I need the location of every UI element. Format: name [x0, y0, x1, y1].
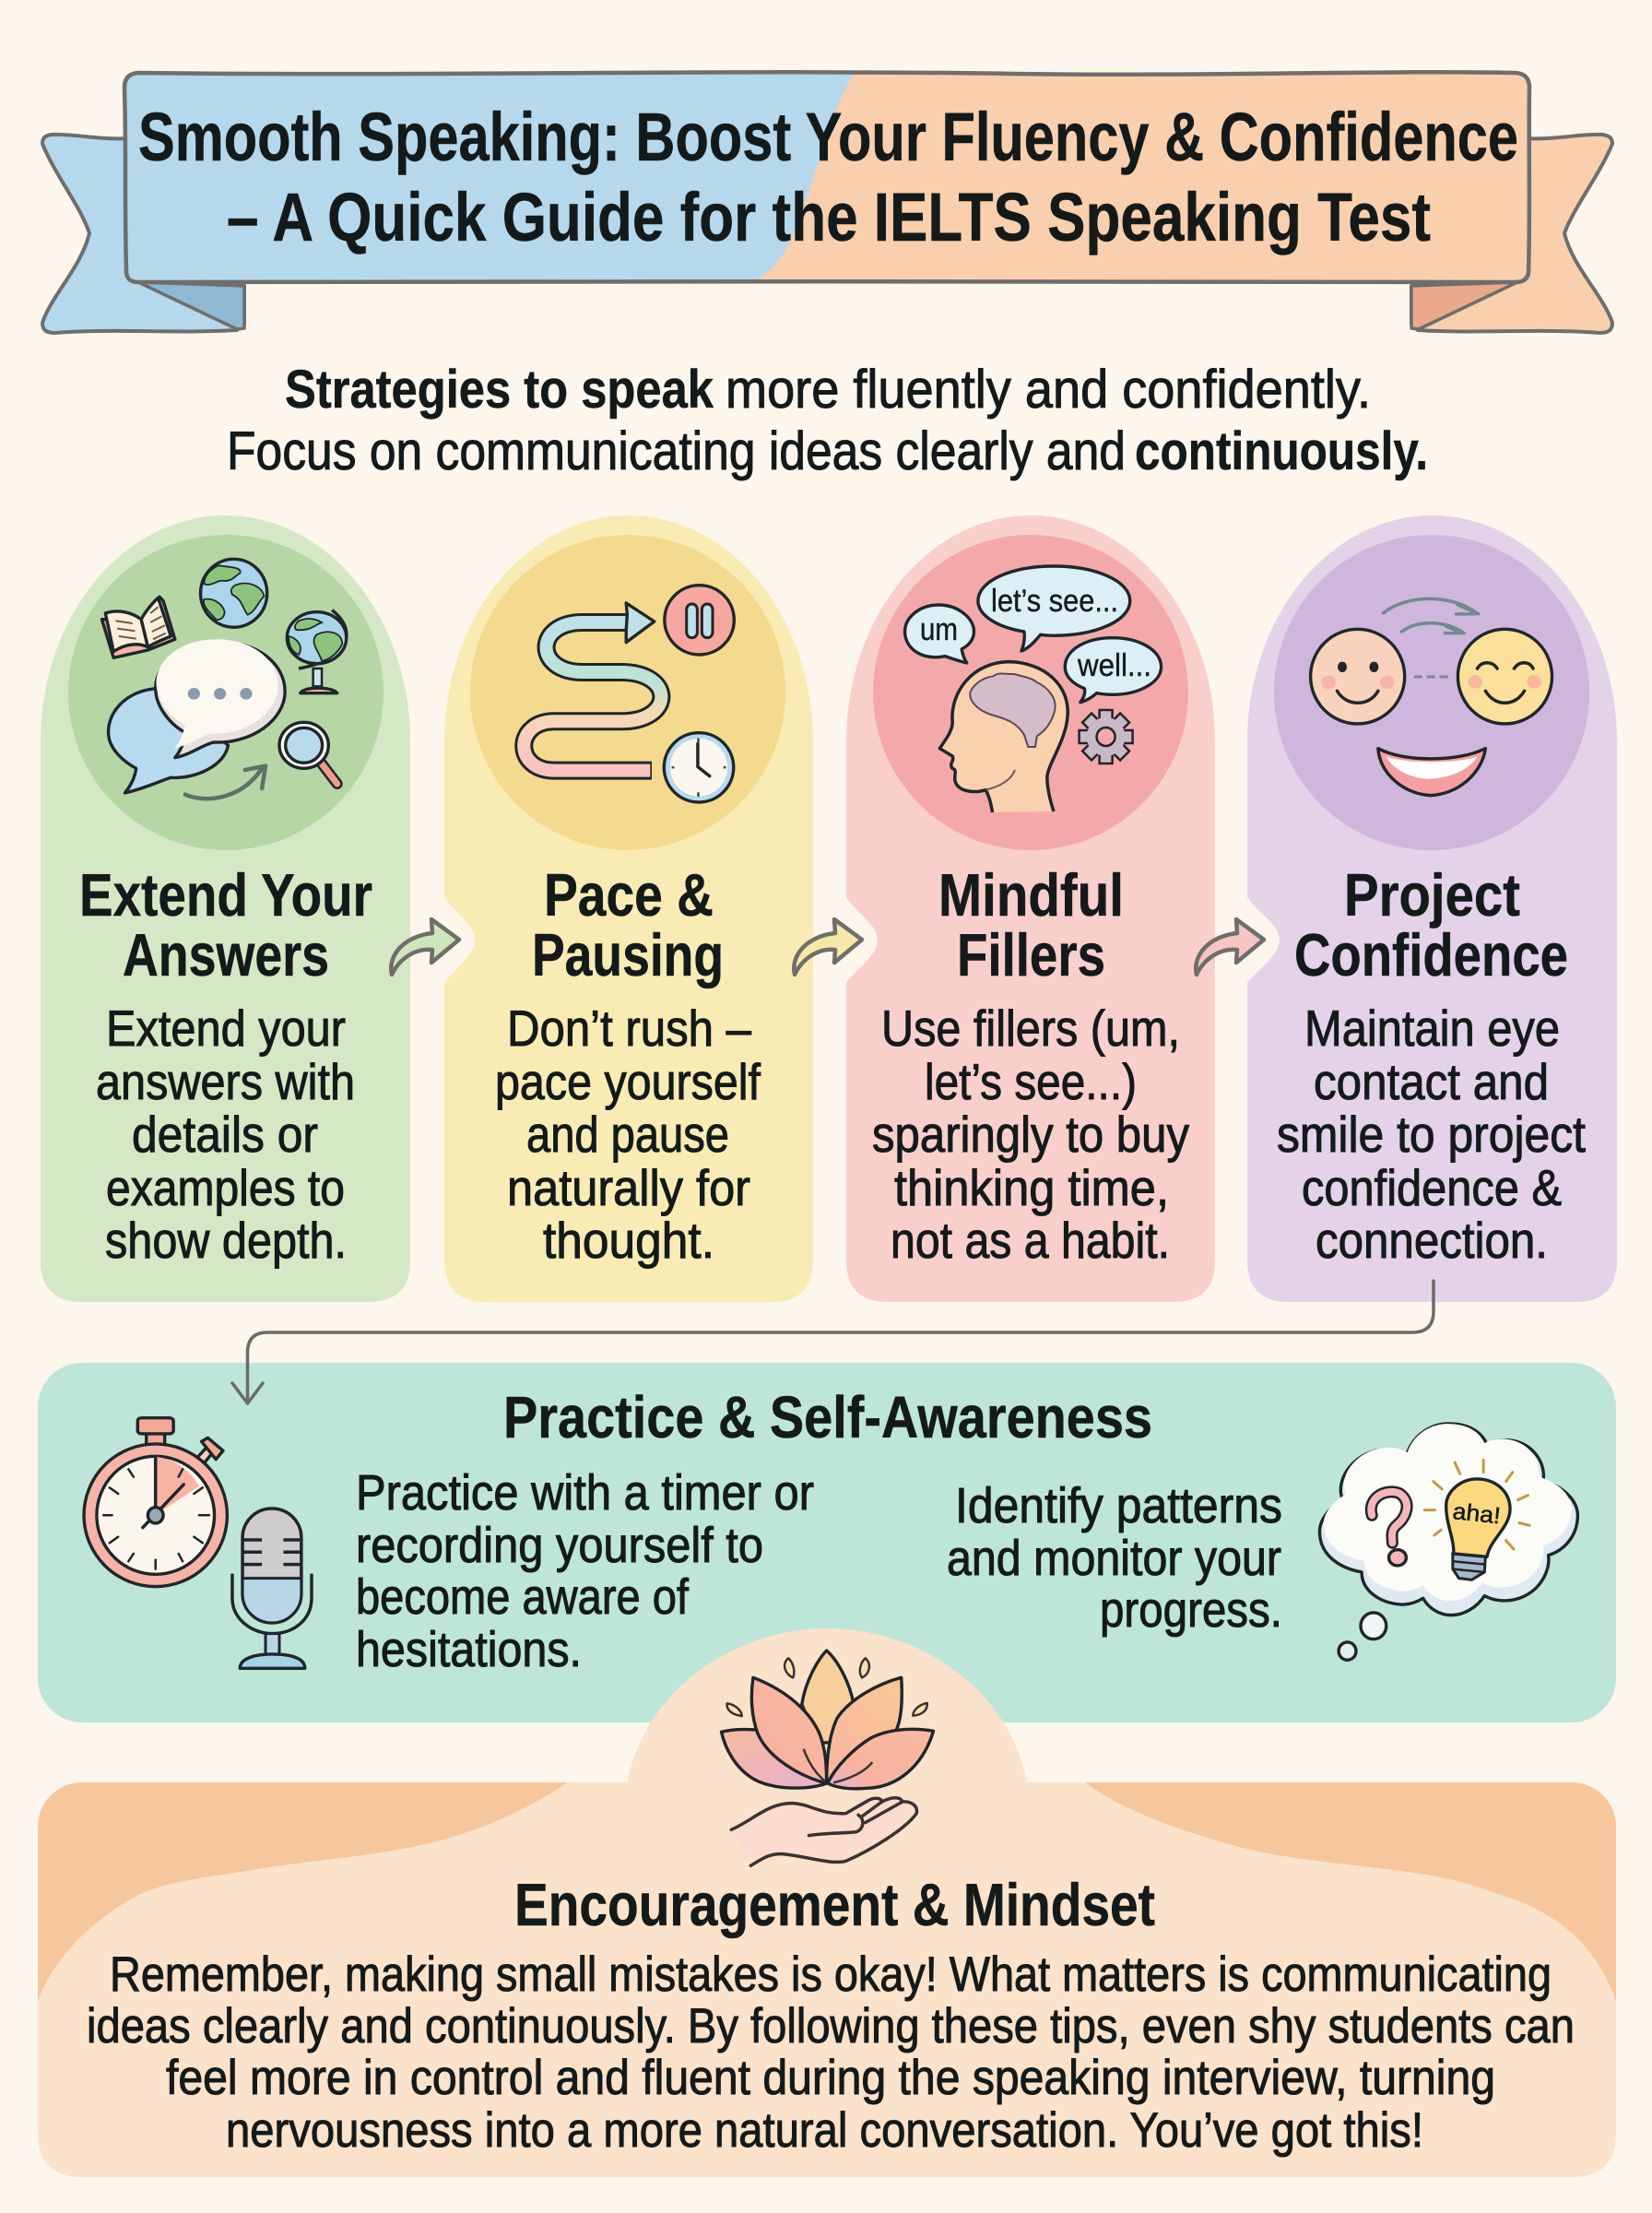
- icon: stopwatch and microphone: [84, 1418, 312, 1668]
- panel light blob: [38, 1782, 1616, 2177]
- card heading: Pace &: [544, 861, 714, 929]
- notch before card 2: [439, 887, 475, 990]
- text: identify patterns: [947, 1478, 1282, 1638]
- text: identify patterns: Identify patterns: [955, 1478, 1282, 1533]
- icon: white speech bubble: [156, 639, 285, 758]
- icon backdrop: [68, 535, 384, 850]
- card heading: [1294, 861, 1568, 988]
- subtitle line 1 bold: Strategies to speak: [285, 360, 714, 420]
- icon: growth arrow: [185, 766, 266, 799]
- panel: extend your answers: [41, 515, 410, 1302]
- card body text: and pause: [526, 1106, 729, 1163]
- card body text: [872, 1000, 1189, 1269]
- icon: blue speech bubble: [109, 689, 229, 793]
- icon: globe: [201, 559, 267, 627]
- icon: stopwatch: [84, 1418, 227, 1587]
- panel dome: [627, 1628, 1027, 1783]
- icon: microphone: [232, 1509, 312, 1668]
- arrow: card 1 to card 2: [391, 919, 459, 975]
- card body text: Maintain eye: [1304, 1000, 1560, 1057]
- cloud: [1319, 1424, 1577, 1615]
- card heading: Project: [1344, 861, 1520, 929]
- card heading: Mindful: [938, 861, 1124, 929]
- icon: winding path, pause and clock: [524, 586, 734, 802]
- text: identify patterns: progress.: [1100, 1582, 1282, 1638]
- card body text: [1277, 1000, 1586, 1269]
- icon: lotus: [722, 1651, 934, 1789]
- icon: speech bubbles, book and globes: [101, 559, 347, 799]
- panel: practice and self-awareness: [38, 1363, 1616, 1722]
- bubble text: um: um: [920, 612, 958, 647]
- card heading: Pausing: [532, 921, 724, 988]
- text: practice with a timer: recording yourself to: [356, 1518, 763, 1573]
- card body text: thinking time,: [894, 1159, 1169, 1216]
- bubble text: well: well...: [1077, 648, 1151, 683]
- bubble: let's see: [978, 566, 1130, 651]
- banner outline: [124, 72, 1529, 282]
- card body text: thought.: [543, 1212, 714, 1269]
- panel: encouragement and mindset: [38, 1628, 1616, 2177]
- card body text: connection.: [1316, 1212, 1548, 1269]
- card background: [41, 515, 410, 1302]
- icon: smiling faces and mouth: [1311, 598, 1552, 796]
- icon: open hand: [731, 1798, 916, 1865]
- banner right tail: [1411, 135, 1612, 333]
- panel background: [38, 1782, 1616, 2177]
- subtitle line 1 regular: more fluently and confidently.: [726, 360, 1371, 420]
- icon backdrop: [470, 535, 785, 850]
- banner left tail: [42, 135, 244, 333]
- card heading: [938, 861, 1124, 988]
- card body text: examples to: [106, 1159, 345, 1216]
- card body text: answers with: [96, 1053, 355, 1110]
- bulb text: aha!: [1451, 1498, 1502, 1529]
- text: practice with a timer: become aware of: [356, 1569, 690, 1625]
- card body text: details or: [132, 1106, 318, 1163]
- panel: mindful fillers: [846, 515, 1215, 1302]
- title line 2: – A Quick Guide for the IELTS Speaking Test: [227, 179, 1431, 255]
- banner right fold: [1411, 282, 1517, 329]
- icon: winding arrow: [524, 603, 661, 771]
- body text: nervousness into a more natural conversation. You’ve got this!: [226, 2103, 1423, 2158]
- subtitle line 2 bold: continuously.: [1135, 421, 1428, 481]
- banner left fold: [138, 282, 244, 329]
- icon: desk globe: [287, 610, 347, 693]
- icon: magnifier: [279, 722, 337, 784]
- icon backdrop: [873, 535, 1188, 850]
- card heading: Confidence: [1294, 921, 1568, 988]
- text: practice with a timer: Practice with a timer or: [356, 1465, 814, 1521]
- card background: [846, 515, 1215, 1302]
- icon: head profile: [939, 662, 1068, 812]
- heading: Practice & Self-Awareness: [503, 1384, 1152, 1450]
- card body text: confidence &: [1302, 1159, 1562, 1216]
- bubble: well: [1065, 638, 1162, 703]
- card body text: [96, 1000, 355, 1269]
- icon: dashed line: [1414, 675, 1451, 678]
- icon: happy face: [1457, 629, 1552, 724]
- card body text: not as a habit.: [891, 1212, 1170, 1269]
- body text: [87, 1947, 1575, 2158]
- icon backdrop: [1274, 535, 1589, 850]
- card heading: Answers: [123, 921, 329, 988]
- card background: [444, 515, 813, 1302]
- card body text: contact and: [1314, 1053, 1549, 1110]
- card heading: Fillers: [957, 921, 1105, 988]
- card body text: [495, 1000, 761, 1269]
- card body text: smile to project: [1277, 1106, 1586, 1163]
- text: identify patterns: and monitor your: [947, 1531, 1281, 1586]
- panel background: [38, 1363, 1616, 1722]
- lightbulb: [1424, 1460, 1529, 1580]
- card heading: Extend Your: [79, 861, 372, 929]
- subtitle: [227, 360, 1428, 481]
- card body text: Don’t rush –: [507, 1000, 751, 1057]
- icon: brain: [970, 674, 1056, 747]
- card body text: show depth.: [105, 1212, 347, 1269]
- icon: lotus and hand: [722, 1651, 934, 1865]
- banner main peach: [124, 72, 1529, 282]
- icon: pause button: [665, 586, 734, 655]
- arrow: card 3 to card 4: [1196, 919, 1264, 975]
- bubble text: let's see: let’s see...: [991, 584, 1118, 619]
- arrow: card 2 to card 3: [794, 919, 862, 975]
- icon: eye contact arrows: [1383, 598, 1479, 633]
- question mark: [1371, 1492, 1407, 1566]
- bubble: um: [905, 605, 974, 663]
- notch before card 3: [841, 887, 878, 990]
- panel: pace and pausing: [444, 515, 813, 1302]
- card body text: Extend your: [106, 1000, 346, 1057]
- subtitle line 2 regular: Focus on communicating ideas clearly and: [227, 421, 1126, 481]
- title banner: [42, 72, 1612, 333]
- icon: open book: [101, 597, 175, 657]
- card body text: pace yourself: [495, 1053, 761, 1110]
- text: practice with a timer: hesitations.: [356, 1622, 582, 1677]
- card body text: naturally for: [507, 1159, 750, 1216]
- connector arrow: card 4 to practice panel: [232, 1281, 1434, 1403]
- card heading: [532, 861, 724, 988]
- icon: clock: [664, 733, 734, 802]
- panel: project confidence: [1247, 515, 1617, 1302]
- card background: [1247, 515, 1617, 1302]
- card body text: Use fillers (um,: [881, 1000, 1180, 1057]
- text: practice with a timer: [356, 1465, 814, 1677]
- body text: feel more in control and fluent during the speaking interview, turning: [166, 2051, 1495, 2105]
- icon: thought cloud with lightbulb: [1319, 1424, 1577, 1660]
- thought dots: [1339, 1613, 1386, 1660]
- banner main blue: [124, 73, 854, 282]
- card body text: let’s see...): [925, 1053, 1137, 1110]
- icon: head with filler bubbles: [905, 566, 1162, 812]
- icon: big smile: [1378, 749, 1485, 796]
- card heading: [79, 861, 372, 988]
- icon: gear: [1080, 710, 1133, 763]
- notch before card 4: [1242, 887, 1280, 990]
- heading: Encouragement & Mindset: [514, 1871, 1155, 1938]
- card body text: sparingly to buy: [872, 1106, 1189, 1163]
- icon: smiling face: [1311, 629, 1405, 724]
